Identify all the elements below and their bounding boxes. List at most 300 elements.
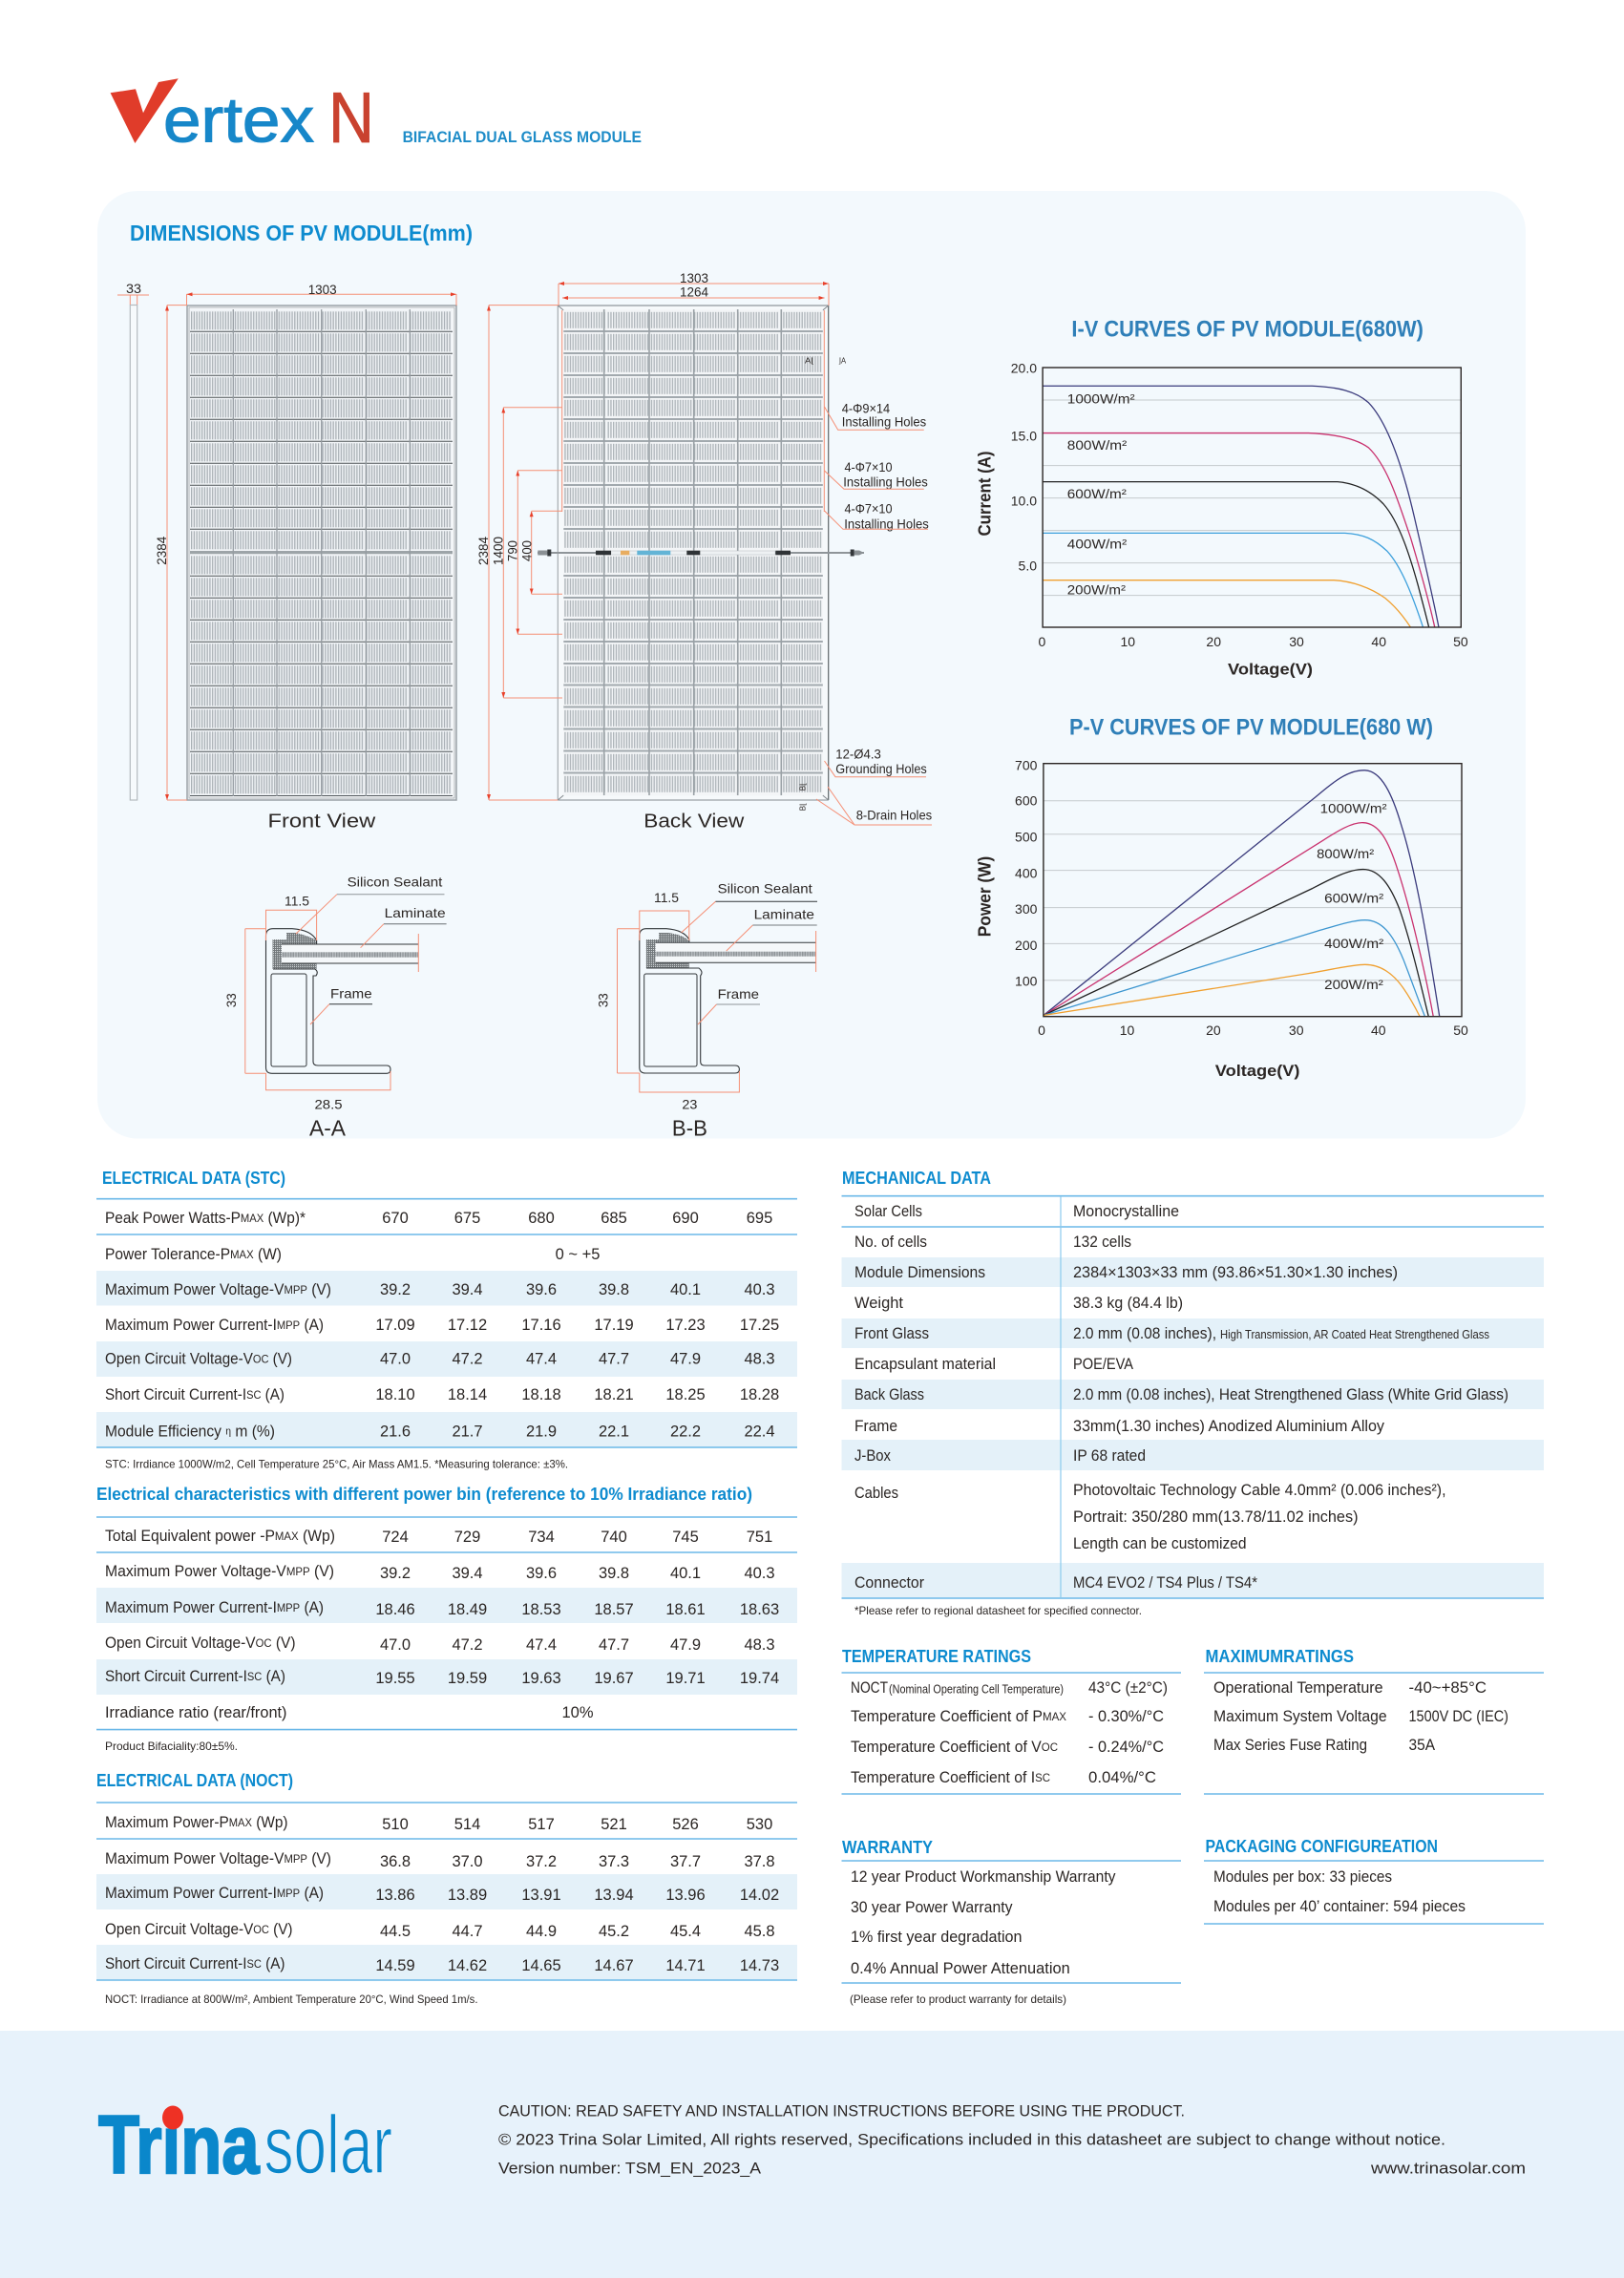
row: Impp: 13.96 <box>665 1887 706 1904</box>
row: irradiance ratio: Irradiance ratio (rear/front) <box>105 1704 286 1721</box>
logo: Vertex N <box>111 77 374 158</box>
chart: P-V curves: 30 <box>1289 1023 1304 1038</box>
row: Isc: Short Circuit Current-ISC (A) <box>105 1955 285 1972</box>
row: maximum system voltage: 1500V DC (IEC) <box>1409 1708 1508 1725</box>
chart: I-V curves: 1000W/m² <box>1067 390 1135 406</box>
drawing: front view panel <box>187 306 456 800</box>
row: Vmpp: 39.4 <box>452 1565 483 1582</box>
drawing: cross section A-A: Silicon Sealant <box>348 874 442 889</box>
row: Voc coefficient <box>851 1739 1164 1756</box>
row: connector: MC4 EVO2 / TS4 Plus / TS4* <box>1073 1574 1258 1592</box>
callouts: back view holes: Installing Holes <box>842 414 926 430</box>
row: connector: Connector <box>854 1574 924 1592</box>
dimension lines: front view: 2384 <box>154 537 169 565</box>
row: Vmpp: 39.8 <box>599 1281 629 1298</box>
note: NOCT: NOCT: Irradiance at 800W/m², Ambient Temperature 20°C, Wind Speed 1m/s. <box>105 1993 477 2006</box>
row: module efficiency: 21.7 <box>452 1423 483 1440</box>
row: Vmpp <box>105 1281 775 1298</box>
drawing: cross section A-A: Laminate <box>385 905 446 920</box>
row: Impp: Maximum Power Current-IMPP (A) <box>105 1885 324 1902</box>
row: encapsulant: POE/EVA <box>1073 1356 1133 1373</box>
list: warranty: 1% first year degradation <box>851 1929 1022 1946</box>
row: maximum power: 514 <box>454 1816 480 1833</box>
row: operational temperature: -40~+85°C <box>1409 1679 1487 1697</box>
row: Vmpp <box>105 1563 775 1582</box>
row: peak power: 690 <box>672 1210 699 1227</box>
chart: P-V curves: 600 <box>1015 793 1038 809</box>
drawing: back view panel <box>558 306 847 811</box>
panel: dimensions and curves <box>97 191 1526 1141</box>
row: total equivalent power <box>105 1528 772 1546</box>
drawing: cross section B-B: 11.5 <box>654 890 679 905</box>
chart: P-V curves: 400 <box>1015 865 1038 880</box>
row: max series fuse rating: Max Series Fuse Rating <box>1213 1737 1367 1754</box>
row: peak power: 670 <box>382 1210 409 1227</box>
caption: front view: Front View <box>267 810 375 833</box>
row: Voc: 47.0 <box>380 1350 411 1367</box>
row: Voc: 47.4 <box>526 1350 557 1367</box>
drawing: back view panel: B⌊ <box>798 783 808 791</box>
row: maximum power: 517 <box>528 1816 555 1833</box>
row: Impp: 13.91 <box>521 1887 561 1904</box>
row: encapsulant <box>854 1356 1133 1373</box>
row: Isc <box>105 1668 779 1687</box>
drawing: cross section B-B <box>595 881 817 1112</box>
footer text: website: www.trinasolar.com <box>1370 2160 1526 2177</box>
heading: packaging configuration: PACKAGING CONFIGUREATION <box>1205 1837 1438 1856</box>
row: total equivalent power: 734 <box>528 1529 555 1546</box>
footer band <box>0 2031 1624 2278</box>
dimension lines: back view <box>475 270 829 800</box>
row: NOCT: 43°C (±2°C) <box>1088 1679 1168 1697</box>
row: Impp: Maximum Power Current-IMPP (A) <box>105 1599 324 1616</box>
row: Isc: 14.65 <box>521 1957 561 1974</box>
chart: P-V curves: 20 <box>1206 1023 1221 1038</box>
row: maximum power: 526 <box>672 1816 699 1833</box>
chart: P-V curves <box>976 757 1468 1080</box>
list: warranty <box>842 1861 1181 1983</box>
row: Voc: 45.2 <box>599 1923 629 1940</box>
chart: I-V curves: 15.0 <box>1011 428 1037 443</box>
row: front glass: High Transmission, AR Coated Heat Strengthened Glass <box>1220 1328 1489 1341</box>
row: Voc: 45.4 <box>670 1923 701 1940</box>
row: frame: Frame <box>854 1418 897 1435</box>
heading: electrical data NOCT: ELECTRICAL DATA (NOCT) <box>96 1771 293 1790</box>
row: Impp: 17.16 <box>521 1317 561 1334</box>
row: cables: Cables <box>854 1485 898 1502</box>
row: Voc: 48.3 <box>744 1636 775 1654</box>
chart: P-V curves: 40 <box>1371 1023 1386 1038</box>
row: peak power: 685 <box>601 1210 627 1227</box>
drawing: back view panel: A⌊ <box>805 357 814 365</box>
row: Voc: Open Circuit Voltage-VOC (V) <box>105 1350 292 1367</box>
table: electrical data NOCT <box>96 1803 797 1980</box>
drawing: back view panel: B⌊ <box>798 803 808 811</box>
row: Voc: 47.4 <box>526 1636 557 1654</box>
chart: P-V curves: 500 <box>1015 829 1038 844</box>
chart: I-V curves: Current (A) <box>976 451 995 537</box>
chart: I-V curves: 40 <box>1371 634 1386 649</box>
row: Pmax coefficient <box>851 1708 1164 1725</box>
dimension lines: back view: 1400 <box>491 537 506 565</box>
row: front glass: Front Glass <box>854 1325 929 1342</box>
chart: I-V curves: 5.0 <box>1019 558 1037 573</box>
list: warranty: 0.4% Annual Power Attenuation <box>851 1960 1070 1977</box>
row: total equivalent power: 724 <box>382 1529 409 1546</box>
heading: dimensions: DIMENSIONS OF PV MODULE(mm) <box>130 221 473 245</box>
caption: B-B: B-B <box>672 1116 707 1141</box>
logo: Vertex N: ertex <box>163 84 314 157</box>
row: Vmpp: 37.2 <box>526 1853 557 1870</box>
list: warranty: 30 year Power Warranty <box>851 1899 1013 1916</box>
row: Impp: 17.23 <box>665 1317 706 1334</box>
drawing: cross section B-B: Laminate <box>754 906 814 921</box>
row: Isc: 14.73 <box>740 1957 779 1974</box>
row: Isc: 19.55 <box>375 1670 415 1687</box>
row: number of cells: 132 cells <box>1073 1234 1131 1251</box>
row: J-Box: IP 68 rated <box>1073 1447 1146 1465</box>
row: Voc <box>105 1635 775 1654</box>
chart: P-V curves: 100 <box>1015 973 1038 988</box>
dimension lines: front view <box>154 282 456 800</box>
row: Isc: 19.74 <box>740 1670 779 1687</box>
row: Isc: 19.59 <box>448 1670 487 1687</box>
row: Impp: 18.53 <box>521 1601 561 1618</box>
row: Vmpp <box>105 1850 775 1870</box>
chart: I-V curves: 200W/m² <box>1067 582 1126 598</box>
row: peak power: 695 <box>747 1210 772 1227</box>
row: module efficiency: 22.2 <box>670 1423 701 1440</box>
row: total equivalent power: 751 <box>747 1529 772 1546</box>
subtitle: BIFACIAL DUAL GLASS MODULE <box>403 129 642 146</box>
row: Vmpp: 39.8 <box>599 1565 629 1582</box>
row: frame <box>854 1418 1385 1435</box>
footer text: caution: CAUTION: READ SAFETY AND INSTALLATION INSTRUCTIONS BEFORE USING THE PRODUCT. <box>498 2102 1185 2120</box>
row: Voc: 47.9 <box>670 1636 701 1654</box>
row: Vmpp: 39.4 <box>452 1281 483 1298</box>
row: peak power: Peak Power Watts-PMAX (Wp)* <box>105 1210 306 1227</box>
row: power tolerance: Power Tolerance-PMAX (W) <box>105 1246 282 1263</box>
heading: electrical data STC: ELECTRICAL DATA (STC) <box>102 1169 285 1188</box>
row: Isc: 18.10 <box>375 1386 415 1403</box>
drawing: cross section A-A: Frame <box>330 985 372 1001</box>
logo: Trina solar <box>98 2099 392 2191</box>
drawing: side view strip <box>117 281 149 800</box>
row: total equivalent power: 745 <box>672 1529 699 1546</box>
row: operational temperature <box>1213 1679 1487 1697</box>
row: weight: 38.3 kg (84.4 lb) <box>1073 1295 1183 1312</box>
row: maximum power: 530 <box>747 1816 772 1833</box>
table: maximum ratings <box>1204 1673 1544 1794</box>
list: packaging <box>1204 1861 1544 1924</box>
row: Impp: 18.61 <box>665 1601 706 1618</box>
row: Impp: 17.12 <box>448 1317 487 1334</box>
row: Vmpp: 40.1 <box>670 1281 701 1298</box>
chart: P-V curves: Power (W) <box>976 856 995 937</box>
drawing: back view panel: ⌋A <box>838 357 847 365</box>
row: Impp: 18.49 <box>448 1601 487 1618</box>
row: Vmpp: 37.0 <box>452 1853 483 1870</box>
row: Vmpp: 39.6 <box>526 1281 557 1298</box>
row: Voc: 45.8 <box>744 1923 775 1940</box>
note: warranty: (Please refer to product warranty for details) <box>850 1993 1066 2006</box>
chart: I-V curves: 400W/m² <box>1067 536 1128 551</box>
row: Pmax coefficient: - 0.30%/°C <box>1088 1708 1164 1725</box>
row: Impp: 18.63 <box>740 1601 779 1618</box>
row: Voc coefficient: - 0.24%/°C <box>1088 1739 1164 1756</box>
row: front glass: 2.0 mm (0.08 inches), <box>1073 1325 1216 1342</box>
row: Impp: 18.46 <box>375 1601 415 1618</box>
row: maximum power: 521 <box>601 1816 627 1833</box>
chart: P-V curves: 300 <box>1015 901 1038 917</box>
row: Impp <box>105 1599 779 1618</box>
row: Vmpp: 37.3 <box>599 1853 629 1870</box>
caption: back view: Back View <box>643 810 745 833</box>
row: Impp: 13.86 <box>375 1887 415 1904</box>
list: warranty: 12 year Product Workmanship Warranty <box>851 1868 1116 1886</box>
row: Isc: 19.63 <box>521 1670 561 1687</box>
row: Voc: Open Circuit Voltage-VOC (V) <box>105 1635 296 1652</box>
row: Voc <box>105 1350 775 1367</box>
row: cables: Length can be customized <box>1073 1535 1247 1552</box>
dimension lines: back view: 2384 <box>475 537 491 565</box>
drawing: cross section B-B: Silicon Sealant <box>718 881 812 896</box>
row: Impp: 17.25 <box>740 1317 779 1334</box>
dimension lines: front view: 1303 <box>308 282 337 297</box>
chart: P-V curves: Voltage(V) <box>1215 1062 1300 1080</box>
row: weight: Weight <box>854 1295 903 1312</box>
row: number of cells <box>854 1234 1131 1251</box>
row: Isc: 14.67 <box>594 1957 634 1974</box>
row: Isc <box>105 1386 779 1403</box>
row: Voc: 44.9 <box>526 1923 557 1940</box>
chart: P-V curves: 400W/m² <box>1324 936 1384 951</box>
row: front glass <box>854 1325 1489 1342</box>
row: J-Box <box>854 1447 1146 1465</box>
row: number of cells: No. of cells <box>854 1234 927 1251</box>
row: Voc: 47.2 <box>452 1350 483 1367</box>
heading: maximum ratings: MAXIMUMRATINGS <box>1205 1647 1354 1666</box>
row: total equivalent power: 729 <box>454 1529 480 1546</box>
chart: I-V curves: 20.0 <box>1011 361 1037 376</box>
row: Vmpp: Maximum Power Voltage-VMPP (V) <box>105 1850 331 1867</box>
row: Impp <box>105 1885 779 1904</box>
row: power tolerance <box>105 1246 600 1263</box>
row: module dimensions: Module Dimensions <box>854 1264 985 1281</box>
drawing: cross section B-B: Frame <box>718 986 759 1002</box>
row: Impp: 18.57 <box>594 1601 634 1618</box>
row: Voc: 47.2 <box>452 1636 483 1654</box>
drawing: cross section B-B: 33 <box>595 993 610 1007</box>
row: Voc: 44.7 <box>452 1923 483 1940</box>
row: J-Box: J-Box <box>854 1447 892 1465</box>
row: module efficiency: 22.1 <box>599 1423 629 1440</box>
row: NOCT <box>851 1679 1168 1697</box>
row: module efficiency: 21.6 <box>380 1423 411 1440</box>
row: Isc: 14.71 <box>665 1957 706 1974</box>
row: Pmax coefficient: Temperature Coefficient of PMAX <box>851 1708 1066 1725</box>
chart: I-V curves: 50 <box>1453 634 1468 649</box>
row: maximum system voltage <box>1213 1708 1508 1725</box>
row: Vmpp: Maximum Power Voltage-VMPP (V) <box>105 1563 334 1580</box>
row: Voc: 48.3 <box>744 1350 775 1367</box>
drawing: cross section A-A: 33 <box>223 993 239 1007</box>
row: Isc: 19.67 <box>594 1670 634 1687</box>
dimension lines: back view: 400 <box>519 540 535 561</box>
callouts: back view holes: 4-Φ7×10 <box>844 501 893 517</box>
row: solar cells: Solar Cells <box>854 1203 922 1220</box>
drawing: cross section B-B: 23 <box>682 1097 698 1112</box>
row: Isc <box>105 1955 779 1974</box>
row: Vmpp: 36.8 <box>380 1853 411 1870</box>
drawing: cross section A-A: 28.5 <box>315 1097 343 1112</box>
list: packaging: Modules per 40’ container: 594 pieces <box>1213 1898 1466 1915</box>
chart: I-V curves: 10.0 <box>1011 493 1037 508</box>
row: peak power: 675 <box>454 1210 480 1227</box>
row: back glass <box>854 1386 1508 1403</box>
row: Isc: 18.18 <box>521 1386 561 1403</box>
row: Impp: 17.09 <box>375 1317 415 1334</box>
row: Vmpp: 37.7 <box>670 1853 701 1870</box>
chart: I-V curves: 800W/m² <box>1067 437 1128 453</box>
row: module dimensions <box>854 1264 1398 1281</box>
row: cables <box>854 1482 1445 1552</box>
row: Voc: 47.7 <box>599 1636 629 1654</box>
table: power bin characteristics <box>96 1517 797 1730</box>
footer text: version: Version number: TSM_EN_2023_A <box>498 2160 762 2177</box>
row: Vmpp: 40.3 <box>744 1281 775 1298</box>
table: mechanical data <box>842 1196 1544 1598</box>
row: irradiance ratio <box>105 1704 594 1721</box>
row: module efficiency: 21.9 <box>526 1423 557 1440</box>
row: Impp: Maximum Power Current-IMPP (A) <box>105 1317 324 1334</box>
row: Voc: 47.0 <box>380 1636 411 1654</box>
dimension lines: back view: 790 <box>505 540 520 561</box>
row: Isc: 18.21 <box>594 1386 634 1403</box>
row: total equivalent power: Total Equivalent power -PMAX (Wp) <box>105 1528 335 1545</box>
chart: P-V curves: 1000W/m² <box>1320 800 1387 815</box>
chart: P-V curves: 50 <box>1453 1023 1468 1038</box>
row: Isc coefficient: Temperature Coefficient of ISC <box>851 1769 1050 1786</box>
drawing: cross section A-A <box>223 874 447 1112</box>
footer text: copyright: © 2023 Trina Solar Limited, All rights reserved, Specifications included in this datasheet are subject to change without notice. <box>498 2131 1445 2148</box>
heading: warranty: WARRANTY <box>842 1838 933 1857</box>
row: Vmpp: 40.3 <box>744 1565 775 1582</box>
row: peak power: 680 <box>528 1210 555 1227</box>
table: temperature ratings <box>842 1673 1181 1794</box>
row: Impp: 17.19 <box>594 1317 634 1334</box>
row: Vmpp: 39.2 <box>380 1565 411 1582</box>
row: Isc coefficient <box>851 1769 1156 1786</box>
logo: Vertex N: N <box>328 77 374 158</box>
note: bifaciality: Product Bifaciality:80±5%. <box>105 1740 238 1753</box>
row: maximum power: 510 <box>382 1816 409 1833</box>
logo: Trina solar: solar <box>264 2099 392 2191</box>
callouts: back view holes: 8-Drain Holes <box>856 808 932 823</box>
logo: Trina solar: Trina <box>98 2099 260 2191</box>
row: operational temperature: Operational Temperature <box>1213 1679 1383 1697</box>
row: Isc: 18.28 <box>740 1386 779 1403</box>
row: connector <box>854 1574 1258 1592</box>
callouts: back view holes <box>816 400 932 825</box>
row: encapsulant: Encapsulant material <box>854 1356 996 1373</box>
row: solar cells <box>854 1203 1179 1220</box>
callouts: back view holes: Installing Holes <box>844 516 929 531</box>
row: Vmpp: 37.8 <box>744 1853 775 1870</box>
row: module efficiency <box>105 1423 775 1440</box>
list: packaging: Modules per box: 33 pieces <box>1213 1868 1392 1886</box>
row: weight <box>854 1295 1183 1312</box>
chart: I-V curves <box>976 361 1468 678</box>
callouts: back view holes: 4-Φ9×14 <box>842 400 890 415</box>
dimension lines: back view: 1264 <box>680 285 708 300</box>
row: Impp: 14.02 <box>740 1887 779 1904</box>
row: Isc: 18.14 <box>448 1386 487 1403</box>
row: Isc: Short Circuit Current-ISC (A) <box>105 1668 285 1685</box>
callouts: back view holes: Grounding Holes <box>835 761 927 776</box>
row: total equivalent power: 740 <box>601 1529 627 1546</box>
chart: P-V curves: 600W/m² <box>1324 891 1384 906</box>
drawing: cross section A-A: 11.5 <box>285 893 309 908</box>
drawing: side view strip: 33 <box>126 281 141 296</box>
chart: P-V curves: 0 <box>1038 1023 1045 1038</box>
row: maximum power: Maximum Power-PMAX (Wp) <box>105 1814 288 1831</box>
callouts: back view holes: 12-Ø4.3 <box>835 746 881 761</box>
row: cables: Portrait: 350/280 mm(13.78/11.02 inches) <box>1073 1508 1358 1526</box>
row: Isc: 19.71 <box>665 1670 706 1687</box>
row: module efficiency: 22.4 <box>744 1423 775 1440</box>
row: Vmpp: 39.2 <box>380 1281 411 1298</box>
row: Isc: 18.25 <box>665 1386 706 1403</box>
chart: P-V curves: 700 <box>1015 757 1038 772</box>
chart: I-V curves: 10 <box>1121 634 1135 649</box>
row: irradiance ratio: 10% <box>561 1704 594 1721</box>
chart: P-V curves: 10 <box>1120 1023 1134 1038</box>
row: max series fuse rating: 35A <box>1409 1737 1435 1754</box>
row: Isc: 14.59 <box>375 1957 415 1974</box>
note: STC: STC: Irrdiance 1000W/m2, Cell Temperature 25°C, Air Mass AM1.5. *Measuring tolerance: ±3%. <box>105 1458 568 1471</box>
row: solar cells: Monocrystalline <box>1073 1203 1179 1220</box>
row: NOCT: (Nominal Operating Cell Temperature) <box>889 1682 1064 1696</box>
heading: electrical characteristics: Electrical characteristics with different power bin (reference to 10% Irradiance ratio) <box>96 1485 752 1504</box>
row: back glass: Back Glass <box>854 1386 924 1403</box>
caption: A-A: A-A <box>309 1116 347 1141</box>
row: Vmpp: Maximum Power Voltage-VMPP (V) <box>105 1281 331 1298</box>
chart: I-V curves: 0 <box>1039 634 1046 649</box>
row: Voc: 47.7 <box>599 1350 629 1367</box>
row: NOCT: NOCT <box>851 1679 888 1697</box>
row: frame: 33mm(1.30 inches) Anodized Aluminium Alloy <box>1073 1418 1385 1435</box>
callouts: back view holes: Installing Holes <box>843 474 928 489</box>
row: Voc: 44.5 <box>380 1923 411 1940</box>
row: Impp: 13.89 <box>448 1887 487 1904</box>
heading: mechanical data: MECHANICAL DATA <box>842 1169 991 1188</box>
row: Voc: Open Circuit Voltage-VOC (V) <box>105 1921 292 1938</box>
chart: I-V curves: Voltage(V) <box>1228 661 1313 678</box>
chart: I-V curves: 20 <box>1206 634 1221 649</box>
dimension lines: back view: 1303 <box>680 270 708 285</box>
row: power tolerance: 0 ~ +5 <box>556 1246 600 1263</box>
row: module dimensions: 2384×1303×33 mm (93.86×51.30×1.30 inches) <box>1073 1264 1398 1281</box>
row: back glass: 2.0 mm (0.08 inches), Heat Strengthened Glass (White Grid Glass) <box>1073 1386 1508 1403</box>
row: Vmpp: 39.6 <box>526 1565 557 1582</box>
row: Impp: 13.94 <box>594 1887 634 1904</box>
table: electrical data STC <box>96 1199 797 1447</box>
row: maximum power <box>105 1814 772 1833</box>
row: Impp <box>105 1317 779 1334</box>
row: Voc <box>105 1921 775 1940</box>
note: connector: *Please refer to regional datasheet for specified connector. <box>854 1604 1142 1617</box>
